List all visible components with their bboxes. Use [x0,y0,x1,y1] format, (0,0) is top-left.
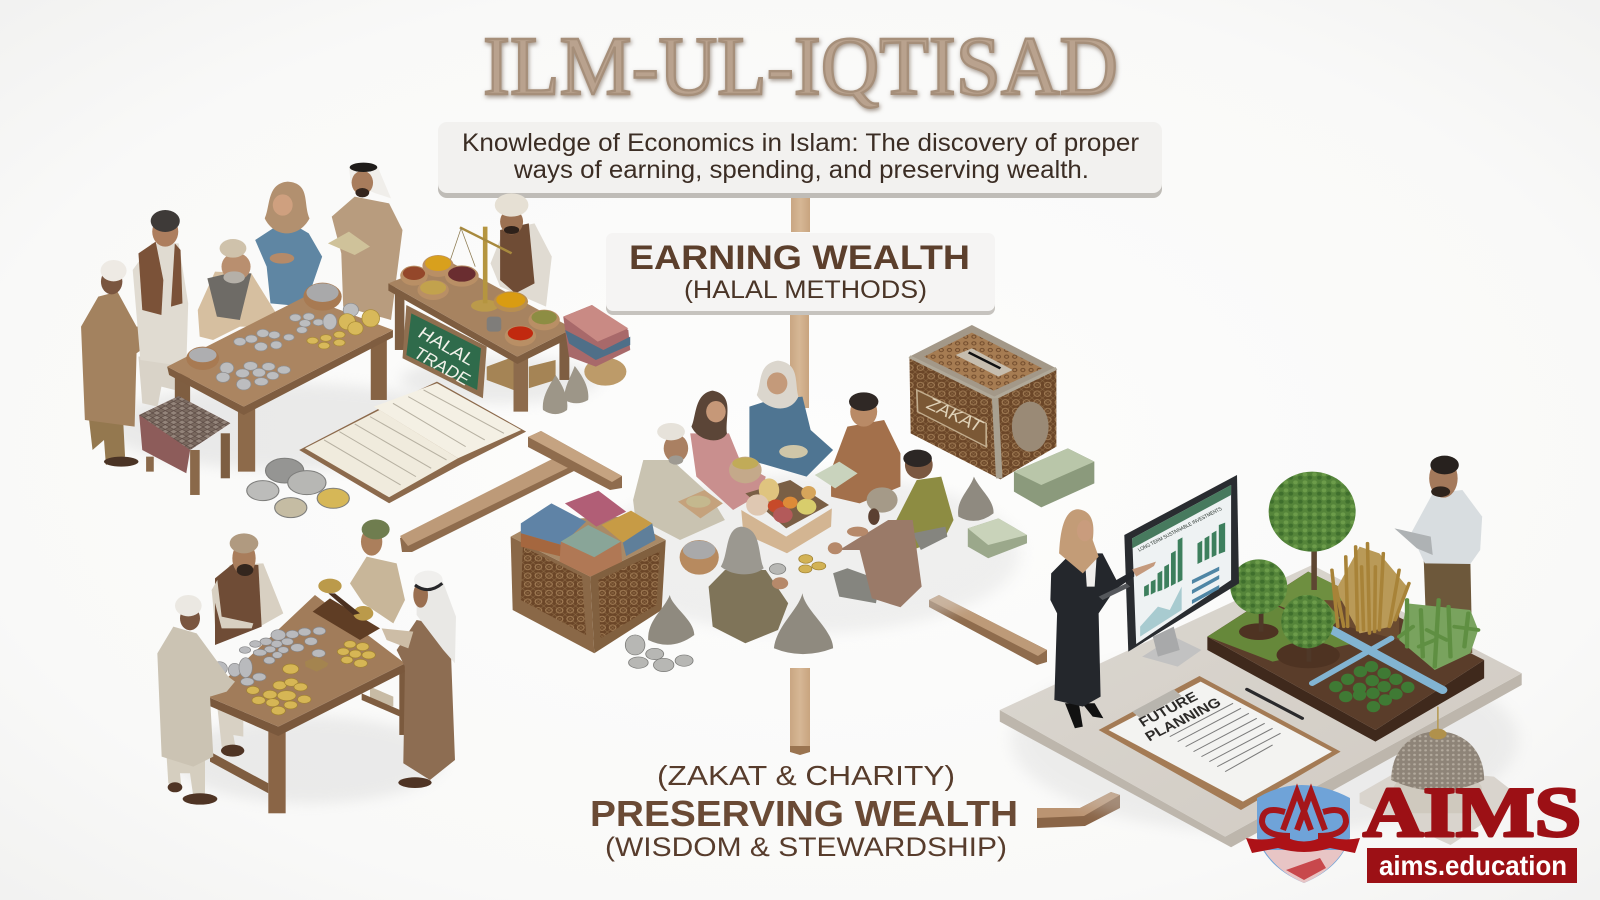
woman in blue dress [255,182,322,307]
future planning clipboard: FUTURE [1136,689,1201,730]
market table [167,297,393,472]
older man sitting [633,423,725,540]
zakat label: ZAKAT [923,394,987,435]
spice table [388,260,573,412]
mosque dome [1360,707,1522,845]
earning wealth heading: EARNING WEALTH [629,239,970,277]
zakat box [909,325,1056,479]
logo: AIMS shield [1246,785,1360,883]
sign: halal trade: HALAL [414,324,479,369]
subtitle line 2: ways of earning, spending, and preserving wealth. [513,156,1089,184]
scene: zakat and charity circle [511,325,1094,672]
connector: earning to zakat [790,313,809,408]
right coin sack [958,477,994,521]
wisdom and stewardship subheading: (WISDOM & STEWARDSHIP) [605,832,1007,862]
clothes chest [511,491,666,653]
irrigation pipes [1312,630,1443,690]
soil block with crops [1207,572,1484,742]
exchange table [207,595,407,813]
balance scale and spice bowls [400,227,560,346]
man in green turban [350,519,405,707]
man in brown robe and headdress [382,571,456,788]
woman seen from back [709,527,788,643]
connector: elbow wood beside preserving wealth [1037,792,1120,828]
carpeted stool [139,396,230,495]
woman presenting [1050,509,1156,728]
connector: wood plank to right scene [929,595,1047,665]
title: ILM-UL-IQTISAD [483,20,1118,113]
coin balance scale [313,579,380,640]
pen [1247,689,1302,718]
monitor with charts [1124,475,1239,667]
man with tablet [1394,456,1482,653]
future planning clipboard [1099,676,1341,810]
preserving wealth heading: PRESERVING WEALTH [590,793,1018,834]
wheat patch [1332,543,1409,633]
logo: website label: aims.education [1379,850,1567,881]
man in white headdress [328,163,403,320]
sign: halal trade [403,305,487,398]
subtitle panel [438,122,1162,198]
woman in blue sitting [749,361,833,477]
man in white cap [157,595,235,805]
loose large coins [247,458,349,518]
woman in pink sitting [690,391,766,510]
future planning clipboard: PLANNING [1143,695,1224,745]
man in brown thobe [81,260,167,467]
panel: earning wealth [606,233,995,315]
coins and bowls on table [186,283,380,390]
grey sacks and coins [625,555,833,672]
trees [1230,472,1356,662]
boy in brown sitting [815,392,900,503]
connector: subtitle to earning [791,197,810,232]
seated old man [198,239,278,340]
boy in green sitting [896,450,954,550]
coin basket [680,540,719,575]
corn patch [1399,600,1478,670]
subtitle line 1: Knowledge of Economics in Islam: The discovery of proper [462,129,1139,157]
logo: AIMS wordmark: AIMS [1363,774,1581,852]
scene: halal trade market [81,163,630,518]
chart title: LONG TERM SUSTAINABLE INVESTMENTS [1137,506,1224,553]
man in brown vest [133,210,188,407]
man praying, seen from back [828,487,922,607]
open ledger book [299,382,526,503]
turbaned merchant [491,193,552,307]
small plant rows [1329,661,1415,712]
connector: T-shaped wood to left scenes [400,431,622,552]
scene: coin exchange table [157,519,456,813]
cloth stack and basket [563,305,630,386]
man in brown vest and cap [212,533,283,757]
silver and gold coins [211,627,375,715]
marble platform [1000,565,1522,847]
halal methods subheading: (HALAL METHODS) [684,276,927,304]
zakat and charity subheading: (ZAKAT & CHARITY) [657,760,955,791]
food box [741,478,832,553]
connector: zakat to preserving [790,668,810,755]
scene: long-term planning platform [1000,456,1522,847]
small coin sacks [543,366,588,414]
sign: halal trade: TRADE [410,344,474,389]
banknote stacks [968,448,1094,558]
